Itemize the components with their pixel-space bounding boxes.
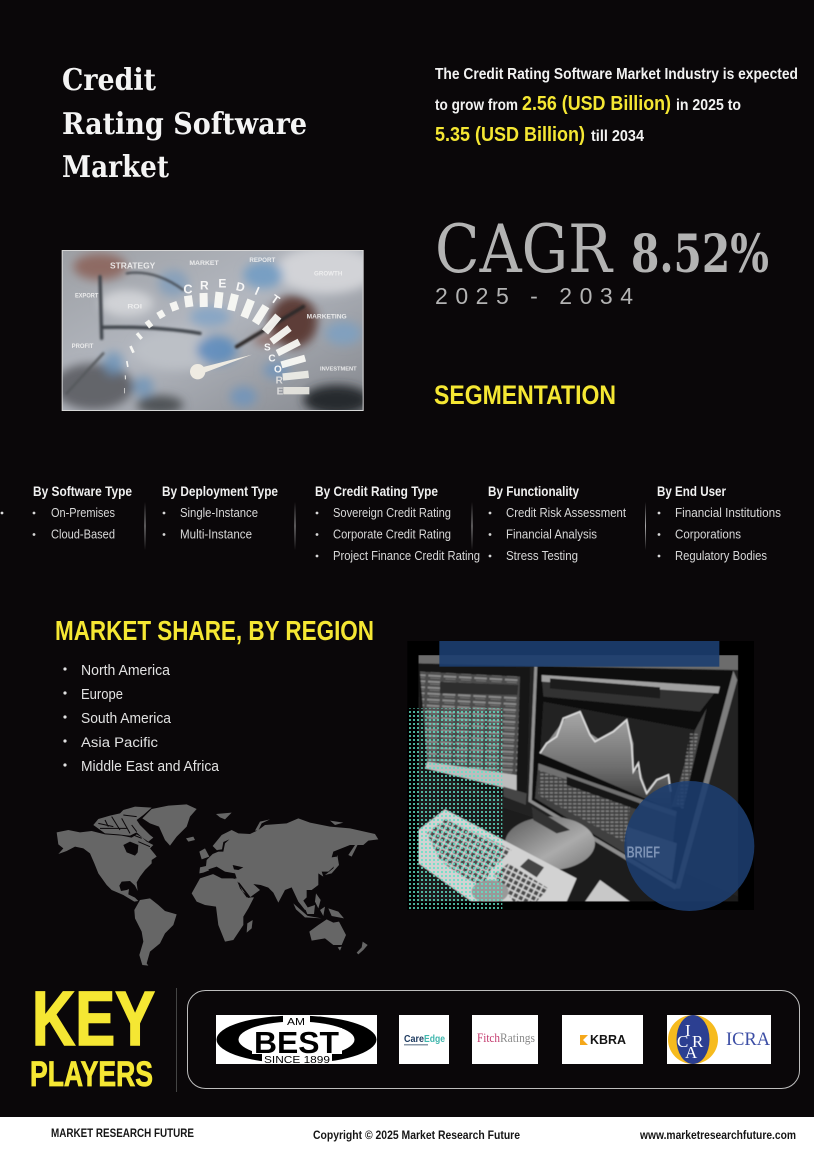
logo: Fitch Ratings: Ratings	[500, 1031, 535, 1045]
logo: AM Best: SINCE 1899	[264, 1055, 331, 1066]
region list: North America	[81, 662, 171, 679]
region list: Middle East and Africa	[81, 758, 220, 775]
segmentation table	[1, 483, 781, 563]
column: by functionality: By Functionality	[488, 483, 579, 499]
blue translucent band	[439, 641, 719, 667]
gauge words: E	[218, 277, 226, 291]
column: by deployment type: Single-Instance	[180, 506, 258, 520]
photo word labels: GROWTH	[314, 270, 343, 277]
map: old world and oceania	[192, 813, 378, 954]
CAGR callout: CAGR	[435, 211, 614, 288]
photo word labels: INVESTMENT	[320, 366, 357, 372]
map: americas and greenland	[57, 804, 197, 966]
footer: Copyright © 2025 Market Research Future	[313, 1128, 520, 1142]
region list: Europe	[81, 686, 123, 703]
gauge words: S	[264, 343, 271, 354]
logo: ICRA: A	[685, 1043, 698, 1062]
gauge words: R	[276, 375, 283, 386]
blue translucent circle	[624, 781, 754, 911]
column: by functionality: Financial Analysis	[506, 528, 597, 542]
column: by credit rating type: Project Finance Credit Rating	[333, 549, 480, 563]
logo: CareEdge: Edge	[424, 1033, 445, 1045]
logo: ICRA: C	[677, 1032, 688, 1051]
photo word labels: MARKET	[189, 260, 219, 267]
intro text: market forecast: to grow from	[435, 97, 518, 114]
heading: key players: KEY	[32, 976, 155, 1062]
gauge words: I	[253, 284, 262, 298]
photo: credit score gauge	[62, 250, 364, 411]
gauge needle	[190, 355, 252, 379]
logo: AM Best: AM	[287, 1017, 305, 1028]
intro text: market forecast: 5.35 (USD Billion)	[435, 124, 585, 146]
blue translucent circle: BRIEF	[627, 844, 660, 861]
gauge words	[183, 277, 284, 397]
logo: Fitch Ratings: Fitch	[477, 1031, 501, 1045]
logo: ICRA: I	[685, 1021, 691, 1040]
column: by credit rating type	[315, 483, 480, 563]
gauge words: R	[200, 278, 209, 292]
column dividers	[144, 502, 646, 550]
logo: AM Best	[216, 1015, 377, 1066]
column: by end user: Regulatory Bodies	[675, 549, 767, 563]
gauge words: O	[274, 364, 282, 375]
CAGR callout: 2025 - 2034	[435, 283, 633, 309]
column: by software type: On-Premises	[51, 506, 115, 520]
stray bullet	[1, 512, 3, 514]
footer: MARKET RESEARCH FUTURE	[51, 1126, 194, 1140]
column: by software type	[33, 483, 132, 542]
column: by software type: Cloud-Based	[51, 528, 115, 542]
photo word labels	[72, 257, 357, 372]
column: by credit rating type: By Credit Rating Type	[315, 483, 438, 499]
title	[62, 63, 307, 185]
key players panel	[188, 990, 800, 1088]
logo: ICRA	[667, 1015, 771, 1064]
region list	[63, 662, 220, 775]
intro text: market forecast: till 2034	[591, 128, 644, 145]
monitor stand	[505, 817, 595, 870]
logo: ICRA: ICRA	[726, 1029, 770, 1050]
logo: KBRA	[562, 1015, 643, 1064]
region list: South America	[81, 710, 172, 727]
photo word labels: ROI	[127, 304, 142, 311]
intro text: market forecast: 2.56 (USD Billion)	[522, 93, 671, 115]
heading: market share by region: MARKET SHARE, BY REGION	[55, 615, 374, 646]
logo: CareEdge: Care	[404, 1033, 424, 1045]
title: Rating Software	[62, 107, 307, 142]
photo word labels: PROFIT	[72, 344, 94, 350]
logo: AM Best: BEST	[254, 1025, 339, 1060]
gauge words: C	[268, 353, 276, 364]
column: by functionality: Credit Risk Assessment	[506, 506, 626, 520]
heading: segmentation: SEGMENTATION	[434, 380, 616, 410]
logo: Fitch Ratings	[472, 1015, 538, 1064]
column: by credit rating type: Sovereign Credit Rating	[333, 506, 451, 520]
right monitor	[532, 666, 732, 840]
column: by software type: By Software Type	[33, 483, 132, 499]
title: Credit	[62, 63, 156, 98]
column: by deployment type: By Deployment Type	[162, 483, 278, 499]
gauge bars	[124, 292, 309, 394]
column: by credit rating type: Corporate Credit Rating	[333, 528, 451, 542]
heading: key players	[30, 976, 155, 1094]
photo word labels: EXPORT	[75, 294, 99, 300]
heading: key players: PLAYERS	[30, 1055, 153, 1094]
gauge words: C	[183, 282, 192, 296]
region list: Asia Pacific	[81, 735, 158, 751]
CAGR callout	[435, 211, 769, 309]
map: inland seas	[208, 839, 251, 898]
column: by end user: Financial Institutions	[675, 506, 781, 520]
gauge words: T	[268, 292, 283, 308]
gauge words: D	[235, 279, 246, 295]
map: hudson bay and arctic channels	[98, 815, 150, 856]
column: by deployment type: Multi-Instance	[180, 528, 252, 542]
column: by deployment type	[162, 483, 278, 542]
photo: trading monitors	[407, 641, 754, 911]
left monitor	[418, 663, 530, 805]
photo word labels: MARKETING	[307, 314, 347, 321]
teal halftone dots	[408, 708, 502, 909]
photo word labels: STRATEGY	[110, 261, 156, 271]
logo: ICRA: R	[692, 1032, 704, 1051]
intro text: market forecast	[435, 66, 798, 146]
logo: KBRA: KBRA	[590, 1032, 627, 1047]
photo word labels: REPORT	[249, 257, 275, 264]
title: Market	[62, 150, 169, 185]
column: by end user: Corporations	[675, 528, 741, 542]
column: by end user: By End User	[657, 483, 726, 499]
footer	[0, 1117, 814, 1150]
world map	[57, 804, 378, 966]
column: by end user	[657, 483, 781, 563]
logo: CareEdge	[399, 1015, 449, 1064]
column: by functionality	[488, 483, 626, 563]
CAGR callout: 8.52%	[631, 224, 769, 285]
keyboard	[418, 809, 577, 902]
gauge words: E	[277, 386, 284, 397]
column: by functionality: Stress Testing	[506, 549, 578, 563]
intro text: market forecast: in 2025 to	[676, 97, 741, 114]
